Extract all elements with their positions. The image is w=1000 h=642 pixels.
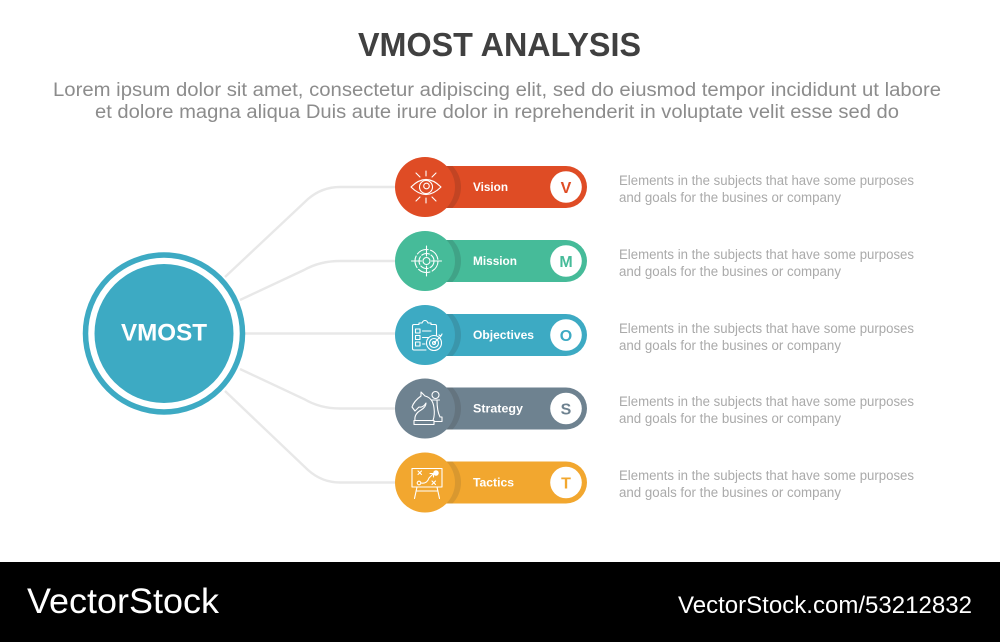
description: Objectives — [619, 321, 914, 353]
row: Mission: M — [559, 254, 573, 271]
description: Tactics: and goals for the busines or company — [619, 485, 841, 500]
icon: tactics board — [412, 468, 442, 498]
icon: clipboard with target — [412, 320, 442, 350]
row: Tactics: T — [561, 475, 571, 492]
central circle: VMOST: VMOST — [121, 320, 207, 346]
row: Objectives: Objectives — [473, 330, 534, 342]
footer band: VectorStock — [27, 582, 220, 621]
description: Vision: Elements in the subjects that have some purposes — [619, 173, 914, 188]
title: VMOST ANALYSIS — [358, 26, 641, 63]
row: Tactics — [395, 452, 587, 512]
subtitle — [53, 80, 941, 123]
row: Objectives — [395, 305, 587, 365]
row: Strategy: S — [561, 401, 572, 418]
subtitle: et dolore magna aliqua Duis aute irure dolor in reprehenderit in voluptate velit esse sed do — [95, 102, 899, 123]
row: Tactics: Tactics — [473, 478, 514, 490]
row: Mission: Mission — [473, 256, 517, 268]
connector lines — [225, 187, 396, 482]
row: Vision: Vision — [473, 182, 508, 194]
row: Strategy: Strategy — [473, 404, 524, 416]
description: Objectives: Elements in the subjects that have some purposes — [619, 321, 914, 336]
row: Vision — [395, 157, 587, 217]
icon: chess knight and pawn — [412, 392, 442, 424]
row: Strategy — [395, 378, 587, 438]
description: Objectives: and goals for the busines or company — [619, 338, 841, 353]
central circle: VMOST — [86, 255, 242, 412]
description: Tactics: Elements in the subjects that have some purposes — [619, 468, 914, 483]
description: Tactics — [619, 468, 914, 500]
footer band — [0, 562, 1000, 642]
description: Strategy: and goals for the busines or company — [619, 411, 841, 426]
description: Strategy — [619, 394, 914, 426]
description: Vision: and goals for the busines or company — [619, 190, 841, 205]
icon: eye — [411, 171, 441, 203]
row: Objectives: O — [560, 328, 572, 345]
description: Vision — [619, 173, 914, 205]
description: Mission: Elements in the subjects that have some purposes — [619, 247, 914, 262]
footer band: VectorStock.com/53212832 — [678, 592, 972, 619]
subtitle: Lorem ipsum dolor sit amet, consectetur adipiscing elit, sed do eiusmod tempor incididunt ut labore — [53, 80, 941, 101]
description: Strategy: Elements in the subjects that have some purposes — [619, 394, 914, 409]
row: Vision: V — [561, 180, 572, 197]
description: Mission: and goals for the busines or company — [619, 264, 841, 279]
icon: target — [412, 246, 442, 276]
description: Mission — [619, 247, 914, 279]
row: Mission — [395, 231, 587, 291]
